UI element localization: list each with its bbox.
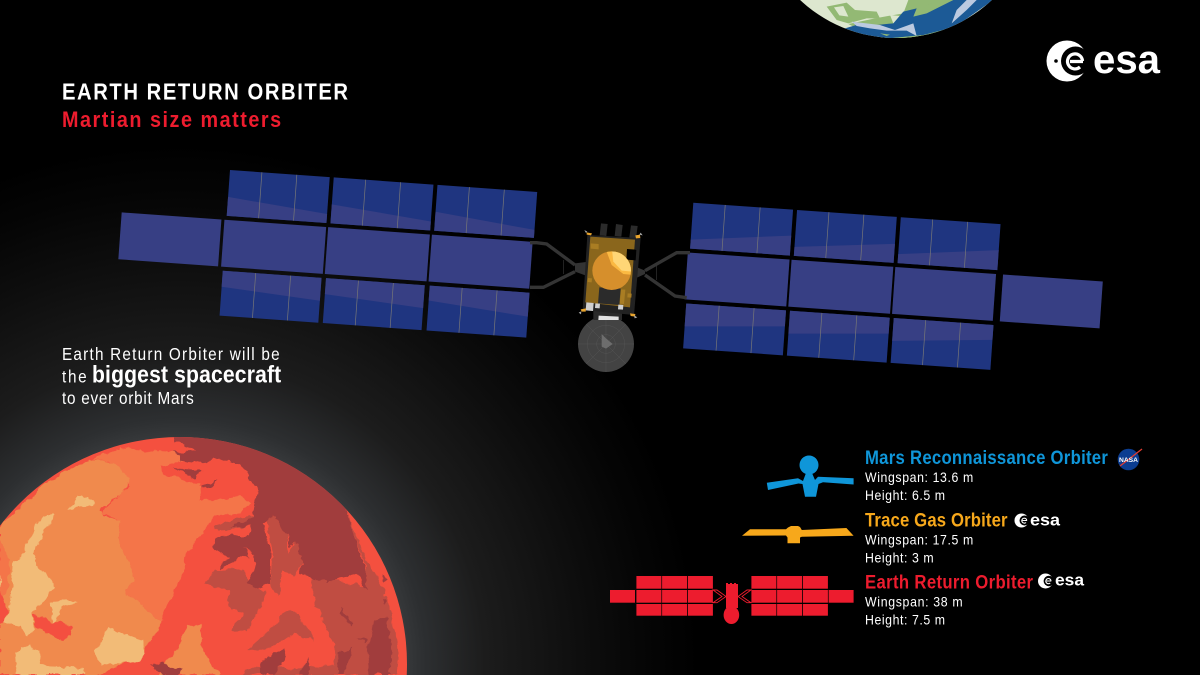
silhouette: Trace Gas Orbiter [742,526,854,543]
text block: biggest spacecraft: to ever orbit Mars [62,388,194,408]
label: Trace Gas Orbiter [865,510,1008,566]
label: Mars Reconnaissance Orbiter: Mars Reconnaissance Orbiter [865,447,1108,468]
subtitle: Martian size matters [62,108,281,132]
logo: ESA small (Trace Gas Orbiter) [1014,510,1061,530]
spacecraft: Earth Return Orbiter [115,162,1106,377]
text block: biggest spacecraft: biggest spacecraft [92,361,282,388]
label: Trace Gas Orbiter: Height: 3 m [865,550,934,566]
silhouette: Earth Return Orbiter [610,576,854,624]
label: Mars Reconnaissance Orbiter: Wingspan: 13.6 m [865,469,973,485]
label: Trace Gas Orbiter: Wingspan: 17.5 m [865,532,973,548]
legend: size comparison [610,447,1142,628]
label: Earth Return Orbiter: Wingspan: 38 m [865,594,963,610]
label: Earth Return Orbiter: Earth Return Orbiter [865,572,1033,593]
label: Mars Reconnaissance Orbiter: Height: 6.5 m [865,487,945,503]
label: Earth Return Orbiter: Height: 7.5 m [865,612,945,628]
silhouette: Mars Reconnaissance Orbiter [767,456,854,497]
planet: Mars [0,427,420,675]
text block: biggest spacecraft: Earth Return Orbiter will be [62,344,280,364]
logo: ESA large: esa [1093,38,1161,82]
logo: ESA small (Earth Return Orbiter) [1038,570,1085,590]
title: EARTH RETURN ORBITER [62,78,348,105]
text block: biggest spacecraft: the [62,366,87,387]
logo: NASA [1118,449,1142,470]
label: Mars Reconnaissance Orbiter [865,447,1108,503]
logo: ESA small (Earth Return Orbiter): esa [1055,570,1085,590]
label: Earth Return Orbiter [865,572,1033,628]
label: Trace Gas Orbiter: Trace Gas Orbiter [865,510,1008,531]
left solar array [115,162,537,338]
logo: ESA small (Trace Gas Orbiter): esa [1030,510,1061,530]
logo: ESA large [1046,38,1161,82]
spacecraft body and antenna [530,223,690,372]
text block: biggest spacecraft [62,344,282,408]
logo: NASA: NASA [1119,458,1139,464]
planet: Earth [800,0,992,38]
right solar array [681,203,1106,377]
